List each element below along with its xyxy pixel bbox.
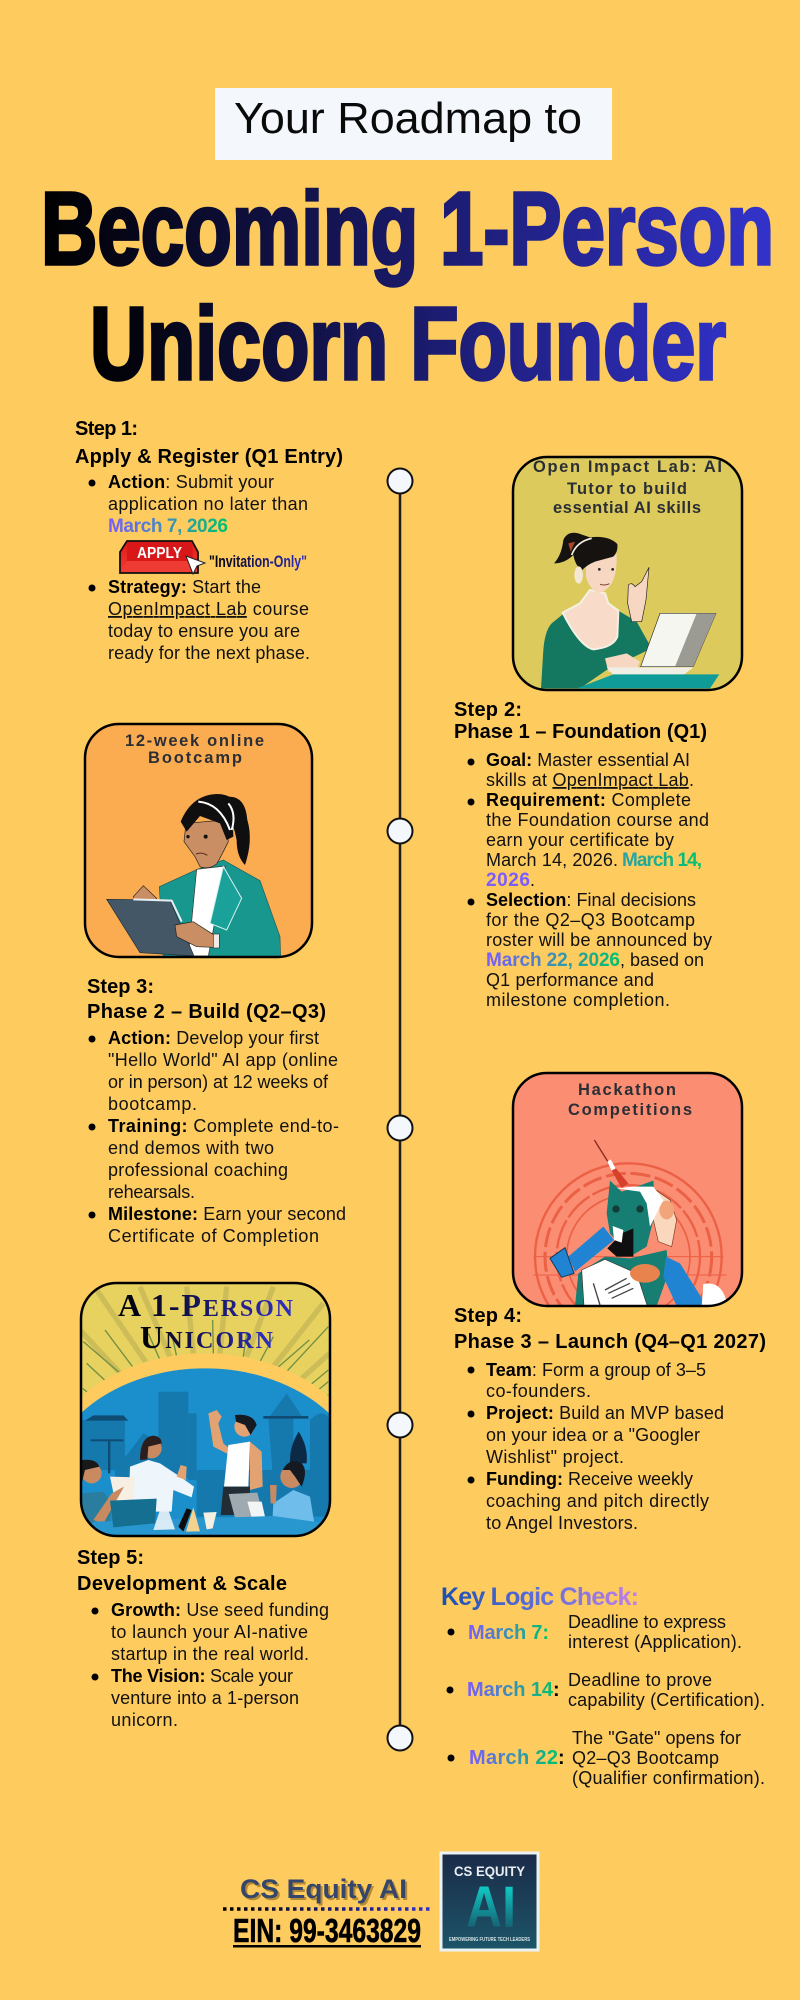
bullet: funding: to Angel Investors.: [486, 1513, 638, 1533]
heading: step 3: Step 3:: [87, 976, 154, 998]
bullet: growth: Growth: Use seed funding: [111, 1600, 329, 1620]
bullet: selection: roster will be announced by: [486, 930, 712, 950]
bullet: selection: Q1 performance and: [486, 970, 654, 990]
bullet: strategy: Strategy: Start the: [108, 577, 261, 597]
heading: step 4: Step 4:: [454, 1305, 522, 1327]
bullet: the vision: The Vision: Scale your: [111, 1666, 293, 1686]
bullet: project: [468, 1403, 724, 1467]
item: march 14: March 14: [467, 1679, 554, 1701]
bullet: growth: startup in the real world.: [111, 1644, 309, 1664]
logo: CS Equity AI: CS EQUITY: [454, 1864, 525, 1879]
heading: step 2: [454, 699, 707, 743]
panel: step 1: [75, 418, 343, 663]
item: march 22: The "Gate" opens for: [572, 1728, 741, 1748]
logo: CS Equity AI: AI: [466, 1875, 516, 1940]
heading: step 3: Phase 2 – Build (Q2–Q3): [87, 1001, 326, 1023]
heading: step 3: [87, 976, 326, 1023]
bullet: milestone: [88, 1204, 346, 1246]
heading: step 1: Step 1:: [75, 418, 138, 440]
timeline: [388, 468, 412, 1750]
bullet: funding: Funding: Receive weekly: [486, 1469, 693, 1489]
bullet: selection: Selection: Final decisions: [486, 890, 696, 910]
panel: step 5: [77, 1547, 329, 1730]
footer: company name and EIN: CS Equity AI: [242, 1876, 409, 1906]
bullet: project: on your idea or a "Googler: [486, 1425, 700, 1445]
bullet: training: professional coaching: [108, 1160, 288, 1180]
bullet: the vision: venture into a 1-person: [111, 1688, 299, 1708]
bullet: the vision: [92, 1666, 299, 1730]
illustration: Open Impact Lab tutor: [513, 457, 742, 690]
heading: step 2: Phase 1 – Foundation (Q1): [454, 721, 707, 743]
item: march 14: Deadline to prove: [568, 1670, 712, 1690]
bullet: training: [88, 1116, 339, 1202]
heading: step 5: Development & Scale: [77, 1573, 287, 1595]
heading: key logic check: Key Logic Check:: [441, 1583, 639, 1611]
bullet: action: Action: Submit your: [108, 472, 274, 492]
panel caption: A 1-PERSON: [118, 1287, 294, 1323]
panel caption: Hackathon: [578, 1081, 676, 1099]
panel caption: [125, 732, 264, 767]
bullet: growth: [92, 1600, 329, 1664]
bullet: training: end demos with two: [108, 1138, 274, 1158]
item: march 7: March 7:: [468, 1622, 549, 1644]
bullet: project: Wishlist" project.: [486, 1447, 624, 1467]
bullet: requirement: the Foundation course and: [486, 810, 709, 830]
heading: step 5: Step 5:: [77, 1547, 144, 1569]
bullet: action: March 7, 2026: [108, 516, 228, 537]
item: march 7: Deadline to express: [568, 1612, 726, 1632]
bullet: strategy: [88, 577, 310, 663]
label: invitation only: "Invitation-Only": [209, 552, 307, 571]
panel caption: 12-week online: [125, 732, 264, 750]
bullet: training: Training: Complete end-to-: [108, 1116, 339, 1136]
item: march 22: [448, 1728, 765, 1788]
footer: company name and EIN: CS Equity AI: [240, 1874, 407, 1904]
bullet: goal: [468, 750, 694, 790]
bullet: goal: skills at OpenImpact Lab.: [486, 770, 694, 790]
bullet: selection: for the Q2–Q3 Bootcamp: [486, 910, 695, 930]
heading: step 4: Phase 3 – Launch (Q4–Q1 2027): [454, 1331, 766, 1353]
panel caption: Tutor to build: [567, 480, 687, 498]
bullet: milestone: Milestone: Earn your second: [108, 1204, 346, 1224]
icon: apply button: APPLY: [137, 545, 183, 562]
illustration: hackathon competitions: [512, 1072, 744, 1308]
bullet: requirement: Requirement: Complete: [486, 790, 691, 810]
panel caption: Bootcamp: [148, 749, 242, 767]
item: march 22: (Qualifier confirmation).: [572, 1768, 765, 1788]
bullet: growth: to launch your AI-native: [111, 1622, 308, 1642]
bullet: milestone: Certificate of Completion: [108, 1226, 319, 1246]
panel caption: [118, 1287, 294, 1355]
illustration: 12-week online bootcamp: [85, 724, 312, 958]
panel: step 3: [87, 976, 346, 1246]
icon: apply button: [120, 541, 205, 574]
item: march 22: :: [558, 1747, 565, 1769]
bullet: requirement: 2026: [486, 870, 530, 891]
bullet: action: or in person) at 12 weeks of: [108, 1072, 329, 1092]
item: march 22: March 22: [469, 1747, 558, 1769]
bullet: requirement: .: [530, 870, 535, 890]
bullet: selection: [468, 890, 712, 1010]
bullet: funding: [468, 1469, 709, 1533]
panel: step 2: [454, 699, 712, 1010]
panel: step 4: [454, 1305, 766, 1533]
bullet: strategy: today to ensure you are: [108, 621, 300, 641]
item: march 14: [446, 1670, 765, 1710]
bullet: selection: milestone completion.: [486, 990, 670, 1010]
item: march 14: :: [553, 1679, 560, 1701]
item: march 14: capability (Certification).: [568, 1690, 765, 1710]
bullet: requirement: March 14, 2026.: [486, 850, 618, 870]
heading: step 5: [77, 1547, 287, 1595]
bullet: goal: Goal: Master essential AI: [486, 750, 690, 770]
bullet: funding: coaching and pitch directly: [486, 1491, 709, 1511]
bullet: action: bootcamp.: [108, 1094, 197, 1114]
bullet: team: co-founders.: [486, 1381, 591, 1401]
item: march 7: [448, 1612, 742, 1652]
logo: CS Equity AI: EMPOWERING FUTURE TECH LEADERS: [449, 1937, 531, 1943]
bullet: training: rehearsals.: [108, 1182, 195, 1202]
bullet: the vision: unicorn.: [111, 1710, 178, 1730]
bullet: selection: March 22, 2026: [486, 950, 620, 971]
bullet: strategy: OpenImpact Lab course: [108, 599, 309, 619]
bullet: action: [88, 1028, 338, 1114]
illustration: a 1-person unicorn: [80, 1282, 332, 1538]
bullet: team: Team: Form a group of 3–5: [486, 1360, 706, 1380]
heading: step 4: [454, 1305, 766, 1353]
bullet: requirement: earn your certificate by: [486, 830, 674, 850]
heading: step 1: Apply & Register (Q1 Entry): [75, 446, 343, 468]
panel: key logic check: [441, 1583, 765, 1788]
bullet: action: application no later than: [108, 494, 308, 514]
bullet: selection: , based on: [620, 950, 704, 970]
bullet: requirement: March 14,: [622, 850, 702, 871]
bullet: strategy: ready for the next phase.: [108, 643, 310, 663]
item: march 7: interest (Application).: [568, 1632, 742, 1652]
panel caption: [533, 458, 722, 517]
bullet: team: [468, 1360, 706, 1401]
panel caption: Competitions: [568, 1101, 692, 1119]
bullet: requirement: [468, 790, 709, 891]
bullet: project: Project: Build an MVP based: [486, 1403, 724, 1423]
title: Becoming 1-Person Unicorn Founder: [41, 171, 774, 401]
title banner: Your Roadmap to: Your Roadmap to: [234, 94, 582, 143]
heading: step 2: Step 2:: [454, 699, 522, 721]
bullet: action: "Hello World" AI app (online: [108, 1050, 338, 1070]
footer: company name and EIN: EIN: 99-3463829: [233, 1912, 421, 1949]
footer: company name and EIN: [223, 1874, 433, 1949]
panel caption: Open Impact Lab: AI: [533, 458, 722, 476]
panel caption: [568, 1081, 692, 1119]
panel caption: UNICORN: [140, 1319, 274, 1355]
title banner: Your Roadmap to: [215, 88, 612, 160]
item: march 22: Q2–Q3 Bootcamp: [572, 1748, 719, 1768]
panel caption: essential AI skills: [553, 499, 701, 517]
bullet: action: Action: Develop your first: [108, 1028, 319, 1048]
heading: step 1: [75, 418, 343, 468]
bullet: action: [88, 472, 308, 537]
logo: CS Equity AI: [441, 1853, 538, 1950]
